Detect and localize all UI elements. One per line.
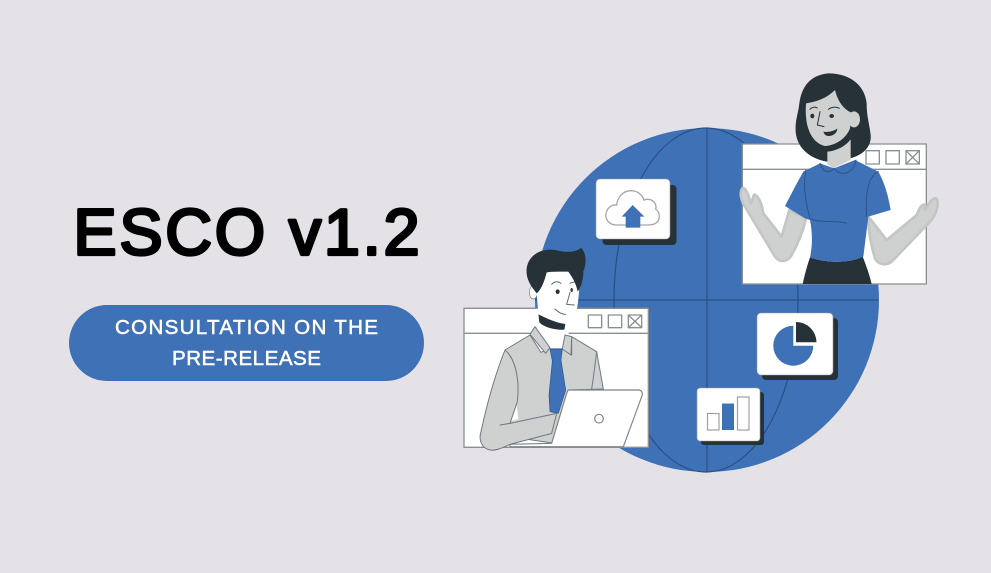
man window bbox=[464, 308, 648, 447]
subtitle pill bbox=[69, 305, 424, 381]
man torso bbox=[498, 335, 603, 443]
woman blouse bbox=[785, 160, 891, 262]
man laptop bbox=[510, 390, 642, 447]
woman window bbox=[742, 144, 926, 284]
icon: pie chart card bbox=[757, 313, 838, 380]
man beard shadow bbox=[538, 313, 566, 330]
man in browser window bbox=[464, 248, 648, 450]
woman arms bbox=[741, 188, 938, 264]
icon: bar chart card bbox=[697, 388, 764, 445]
man hair bbox=[527, 248, 586, 293]
man shirt gap bbox=[509, 405, 518, 422]
globe bbox=[535, 128, 879, 472]
man collar bbox=[530, 327, 572, 355]
woman skirt bbox=[803, 257, 872, 284]
subtitle pill: CONSULTATION ON THE bbox=[115, 316, 378, 339]
man neck bbox=[530, 323, 572, 348]
man arm bbox=[480, 350, 597, 450]
title: ESCO v1.2 bbox=[74, 197, 420, 269]
woman hair bbox=[796, 73, 871, 162]
woman face bbox=[806, 90, 860, 146]
subtitle pill: PRE-RELEASE bbox=[172, 347, 321, 370]
man face bbox=[529, 271, 579, 324]
icon: cloud upload card bbox=[596, 179, 676, 245]
woman neck bbox=[827, 139, 851, 168]
woman in browser window bbox=[741, 73, 938, 284]
man tie bbox=[549, 349, 566, 413]
